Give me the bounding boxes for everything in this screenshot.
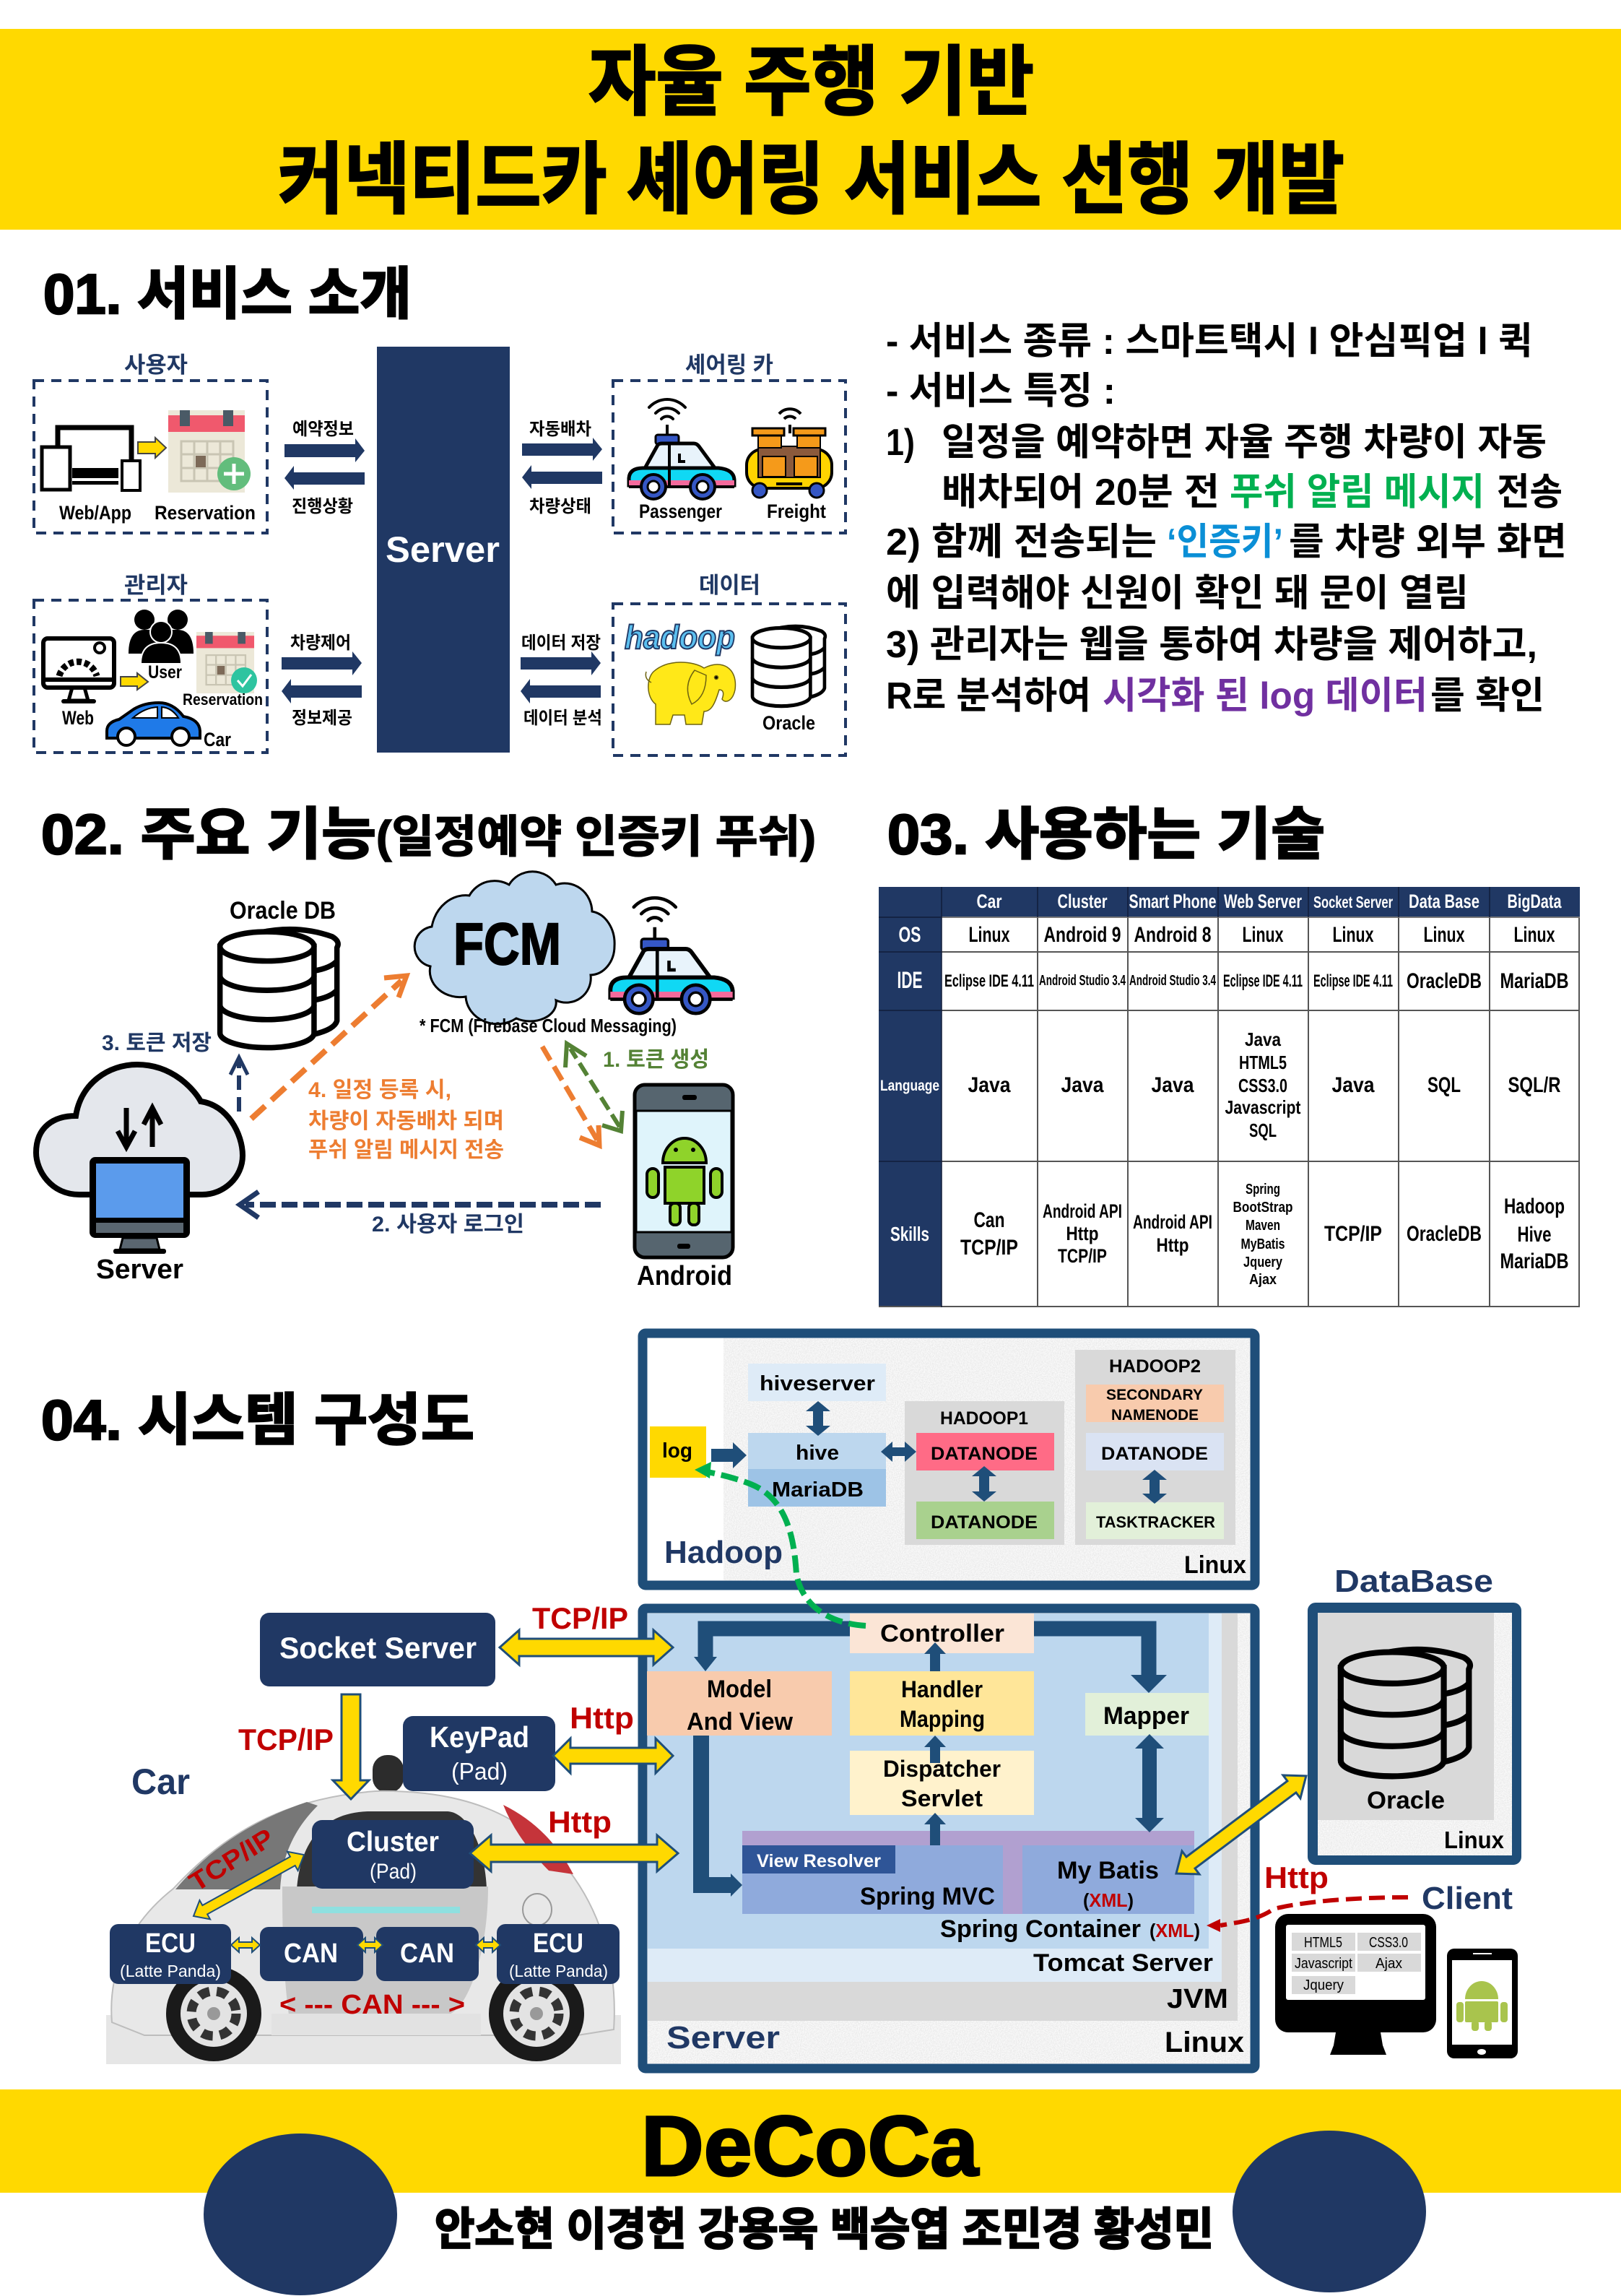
label: user login: 2. 사용자 로그인	[372, 1213, 524, 1236]
text block: service description: 일정을 예약하면 자율 주행 차량이 자동	[942, 422, 1547, 464]
text block: service description: 푸쉬 알림 메시지	[1230, 472, 1485, 514]
table: technologies: CSS3.0	[1238, 1075, 1287, 1096]
hadoop2 node	[1075, 1350, 1235, 1545]
table: technologies: Javascript	[1225, 1096, 1301, 1118]
handler mapping: Mapping	[900, 1706, 985, 1732]
table: technologies: Android Studio 3.4	[1129, 973, 1217, 989]
table: technologies: Android API	[1043, 1200, 1122, 1222]
can right box	[376, 1927, 479, 1981]
table: technologies: SQL	[1249, 1119, 1277, 1141]
text block: service description: 2) 함께 전송되는	[886, 521, 1157, 563]
label: oracle db: Oracle DB	[230, 897, 336, 924]
icon: taxi	[610, 898, 733, 1013]
model and view: Model	[707, 1676, 772, 1703]
text block: service description: 를 차량 외부 화면	[1289, 521, 1567, 563]
icon: calendar add	[168, 410, 251, 493]
arrows: server to car	[522, 420, 602, 516]
arrow: store token	[230, 1057, 248, 1112]
table: technologies: BootStrap	[1233, 1200, 1292, 1216]
table: technologies: Smart Phone	[1129, 891, 1216, 912]
icon: devices	[42, 428, 140, 490]
icon: FCM cloud: FCM	[453, 911, 561, 977]
panel: hadoop: Hadoop	[664, 1535, 783, 1570]
text block: service description: 3) 관리자는 웹을 통하여 차량을 제어하고,	[886, 624, 1537, 666]
hive stack	[748, 1364, 886, 1507]
arrow: fcm to android	[542, 1047, 599, 1145]
handler mapping: Handler	[901, 1676, 983, 1702]
label: step 4	[308, 1078, 504, 1162]
icon: android phone	[635, 1085, 733, 1257]
circle left	[204, 2133, 397, 2295]
icon: elephant	[646, 662, 735, 724]
icon: client monitor: CSS3.0	[1369, 1935, 1408, 1951]
heading: 01 service intro: 01. 서비스 소개	[43, 262, 412, 326]
hadoop2 node: DATANODE	[1101, 1444, 1208, 1464]
table: technologies: Java	[1151, 1073, 1194, 1097]
text block: service description: 배차되어 20분 전	[942, 472, 1220, 514]
panel: server: Spring Container	[940, 1915, 1141, 1943]
table: technologies: TCP/IP	[1058, 1245, 1107, 1267]
labels: protocols: TCP/IP	[532, 1601, 628, 1635]
heading: 02 main feature	[41, 802, 816, 866]
icon: client monitor	[1275, 1914, 1436, 2055]
icon: server cloud	[36, 1065, 243, 1254]
text block: service description: - 서비스 종류 : 스마트택시 l 안심픽업 l 퀵	[886, 321, 1533, 363]
icon: client tablet	[1447, 1949, 1518, 2058]
panel: user: Web/App	[59, 502, 131, 524]
panel: user	[34, 352, 267, 533]
icon: web monitor	[43, 638, 114, 703]
label: car: Car	[131, 1762, 190, 1802]
label: client: Client	[1422, 1881, 1513, 1916]
log box: log	[662, 1439, 692, 1463]
table: technologies: Linux	[1424, 923, 1465, 947]
table: technologies: Data Base	[1409, 891, 1479, 912]
arrows: admin to server: 차량제어	[290, 633, 351, 653]
arrows: user to server	[284, 420, 365, 516]
icon: client monitor: HTML5	[1304, 1935, 1342, 1951]
table: technologies: TCP/IP	[1324, 1222, 1382, 1246]
table: technologies: Skills	[890, 1223, 929, 1245]
labels: protocols: Http	[548, 1805, 612, 1839]
table: technologies: Linux	[969, 923, 1010, 947]
hadoop1 node: DATANODE	[931, 1512, 1038, 1533]
note: FCM: * FCM (Firebase Cloud Messaging)	[420, 1015, 677, 1036]
table: technologies: Http	[1066, 1223, 1099, 1244]
ecu right box: ECU	[533, 1928, 583, 1959]
arrows: server to data: 데이터 저장	[521, 633, 601, 653]
panel: admin: Web	[62, 707, 94, 729]
panel: data: Oracle	[762, 712, 815, 734]
table: technologies: Web Server	[1224, 891, 1302, 912]
label: step 4: 4. 일정 등록 시,	[308, 1078, 451, 1102]
hive stack: hive	[796, 1442, 839, 1465]
table: technologies: Android 8	[1134, 923, 1212, 947]
icon: arrow	[121, 673, 148, 690]
icon: hadoop logo: hadoop	[625, 618, 735, 656]
label: step 4: 푸쉬 알림 메시지 전송	[308, 1138, 504, 1162]
panel: sharing car: Freight	[767, 501, 826, 522]
dispatcher servlet	[850, 1751, 1034, 1815]
text block: service description: 에 입력해야 신원이 확인 돼 문이 열림	[886, 573, 1469, 615]
footer banner	[0, 2089, 1621, 2295]
ecu left box: ECU	[145, 1928, 196, 1959]
arrow: user login	[240, 1192, 601, 1218]
footer banner: 안소현 이경헌 강용욱 백승엽 조민경 황성민	[435, 2205, 1214, 2255]
table: technologies: Language	[880, 1078, 939, 1094]
icon: users	[129, 610, 194, 664]
arrows: car bus	[231, 1938, 500, 1952]
cluster box	[312, 1820, 474, 1889]
table: technologies: MyBatis	[1240, 1236, 1285, 1252]
label: token generate: 1. 토큰 생성	[603, 1048, 709, 1072]
socket server box	[260, 1613, 495, 1686]
table: technologies: OS	[898, 923, 921, 947]
panel: server: Tomcat Server	[1033, 1949, 1213, 1977]
label: step 4: 차량이 자동배차 되며	[308, 1109, 504, 1133]
table: technologies: SQL/R	[1508, 1073, 1561, 1097]
arrows: admin to server	[282, 633, 362, 728]
panel: user: Reservation	[155, 502, 256, 524]
arrows: server to car: 자동배차	[529, 420, 591, 439]
arrows: user to server: 예약정보	[292, 420, 354, 439]
panel: push flow diagram	[36, 872, 733, 1291]
panel: admin: Car	[204, 729, 231, 750]
table: technologies: Java	[968, 1073, 1011, 1097]
arrow: client to spring dashed	[1207, 1897, 1408, 1932]
arrows: connections	[333, 1630, 1315, 1885]
panel: car	[106, 1613, 621, 2064]
panel: admin: Reservation	[183, 690, 263, 709]
table: technologies: Java	[1245, 1028, 1281, 1050]
label: server: Server	[96, 1255, 183, 1285]
panel: hadoop: Linux	[1184, 1551, 1246, 1579]
table: technologies: OracleDB	[1407, 969, 1482, 993]
labels: protocols	[238, 1601, 1329, 1894]
hadoop1 node: DATANODE	[931, 1444, 1038, 1464]
title banner: 자율 주행 기반	[588, 40, 1034, 125]
model and view	[647, 1671, 832, 1736]
model and view: And View	[687, 1708, 794, 1736]
handler mapping	[850, 1671, 1034, 1736]
icon: arrow	[138, 438, 166, 458]
label: tcp ip diagonal: TCP/IP	[184, 1822, 279, 1897]
text block: service description: R로 분석하여	[886, 675, 1091, 717]
text block: service description: 를 확인	[1430, 675, 1544, 717]
icon: client monitor: Jquery	[1303, 1977, 1344, 1993]
table: technologies: Maven	[1246, 1218, 1280, 1234]
table: technologies: Http	[1157, 1234, 1188, 1256]
log box	[650, 1426, 706, 1478]
arrows: server to car: 차량상태	[529, 497, 591, 516]
hadoop1 node: HADOOP1	[940, 1408, 1028, 1429]
table: technologies: Hadoop	[1504, 1195, 1565, 1218]
table: technologies: Android Studio 3.4	[1039, 973, 1126, 989]
labels: protocols: TCP/IP	[238, 1723, 334, 1756]
panel: server	[643, 1608, 1255, 2068]
icon: passenger car	[629, 399, 734, 499]
panel: database: Oracle	[1367, 1787, 1445, 1814]
text block: service description: 시각화 된 log 데이터	[1103, 675, 1427, 717]
footer banner: DeCoCa	[641, 2099, 979, 2194]
heading: 02 main feature: (일정예약 인증키 푸쉬)	[376, 813, 816, 862]
table: technologies: HTML5	[1239, 1052, 1287, 1073]
cluster box: (Pad)	[370, 1860, 417, 1884]
table: technologies: Linux	[1242, 923, 1284, 947]
controller	[850, 1613, 1034, 1653]
icon: FCM cloud	[414, 872, 614, 1024]
hadoop2 node: TASKTRACKER	[1096, 1513, 1215, 1531]
arrows: user to server: 진행상황	[292, 497, 353, 516]
icon: blue car	[107, 703, 200, 745]
panel: server: Linux	[1165, 2027, 1244, 2058]
panel: data: 데이터	[699, 573, 760, 598]
can left box: CAN	[284, 1938, 338, 1969]
icon: client monitor: Ajax	[1376, 1956, 1402, 1972]
table: technologies: IDE	[897, 967, 923, 993]
icon: client monitor: Javascript	[1295, 1956, 1352, 1972]
keypad box: KeyPad	[430, 1720, 529, 1754]
icon: database	[752, 626, 825, 706]
title banner	[0, 29, 1621, 230]
cluster box: Cluster	[347, 1827, 439, 1858]
arrow: schedule push	[251, 976, 407, 1119]
panel: sharing car: Passenger	[639, 501, 722, 522]
table: technologies: TCP/IP	[960, 1236, 1018, 1260]
table: technologies: Android 9	[1044, 923, 1121, 947]
dispatcher servlet: Dispatcher	[883, 1756, 1001, 1782]
table: technologies: MariaDB	[1500, 969, 1568, 993]
arrows: spring flow	[694, 1629, 1167, 1897]
table: technologies: Java	[1331, 1073, 1375, 1097]
hadoop2 node: HADOOP2	[1109, 1356, 1201, 1377]
panel: service architecture	[34, 347, 846, 755]
panel: server: JVM	[1167, 1984, 1228, 2014]
controller: Controller	[880, 1620, 1004, 1647]
icon: autonomous car	[106, 1755, 621, 2064]
table: technologies: Can	[973, 1208, 1005, 1232]
table: technologies: Eclipse IDE 4.11	[1223, 971, 1303, 991]
table: technologies: Android API	[1133, 1211, 1212, 1233]
mapper	[1085, 1693, 1209, 1736]
table: technologies: Ajax	[1249, 1272, 1277, 1288]
table: technologies	[879, 887, 1580, 1307]
mapper: Mapper	[1103, 1702, 1189, 1730]
panel: admin	[34, 573, 267, 753]
dispatcher servlet: Servlet	[901, 1785, 983, 1811]
panel: database: Linux	[1444, 1827, 1505, 1853]
arrows: server to data: 데이터 분석	[523, 709, 602, 728]
panel: sharing car: 셰어링 카	[685, 352, 773, 378]
label: android: Android	[637, 1261, 732, 1291]
table: technologies: Spring	[1246, 1182, 1280, 1197]
table: technologies: BigData	[1508, 891, 1562, 912]
hadoop1 node	[905, 1401, 1064, 1545]
hadoop2 node: SECONDARY	[1106, 1387, 1203, 1403]
ecu left box	[110, 1924, 231, 1984]
panel: database	[1313, 1564, 1516, 1860]
server column	[377, 347, 510, 753]
table: technologies: Car	[976, 891, 1002, 912]
hive stack: MariaDB	[772, 1478, 864, 1502]
table: technologies: Linux	[1513, 923, 1555, 947]
table: technologies: Jquery	[1243, 1255, 1283, 1270]
table: technologies: Eclipse IDE 4.11	[1313, 971, 1393, 991]
ecu left box: (Latte Panda)	[120, 1962, 221, 1980]
arrows: server to data	[521, 633, 602, 728]
panel: data	[613, 573, 846, 755]
keypad box: (Pad)	[451, 1758, 508, 1785]
arrow: controller log dashed	[695, 1462, 866, 1626]
title banner: 커넥티드카 셰어링 서비스 선행 개발	[278, 136, 1344, 223]
panel: user: 사용자	[124, 352, 188, 378]
text block: service description: 1)	[886, 422, 915, 464]
text block: service description: 전송	[1497, 472, 1563, 514]
spring mvc group: Spring MVC	[860, 1883, 995, 1910]
panel: hadoop	[643, 1333, 1255, 1585]
labels: protocols: Http	[570, 1701, 634, 1735]
spring mvc group: My Batis	[1057, 1857, 1159, 1884]
label: token store: 3. 토큰 저장	[102, 1031, 212, 1055]
hadoop2 node: NAMENODE	[1111, 1407, 1199, 1424]
socket server box: Socket Server	[279, 1631, 477, 1665]
text block: service description	[886, 321, 1567, 717]
panel: admin: User	[148, 662, 182, 683]
table: technologies: MariaDB	[1500, 1249, 1568, 1273]
arrow: log to hive	[711, 1442, 747, 1468]
table: technologies: Linux	[1333, 923, 1374, 947]
arrow: hive to datanode	[881, 1442, 916, 1462]
panel: server: Server	[666, 2020, 780, 2055]
icon: calendar check	[196, 632, 257, 693]
labels: protocols: Http	[1264, 1860, 1329, 1894]
spring mvc group: View Resolver	[757, 1851, 881, 1871]
table: technologies: Cluster	[1057, 891, 1108, 912]
icon: database	[1341, 1650, 1470, 1776]
text block: service description: - 서비스 특징 :	[886, 371, 1116, 412]
icon: database	[220, 930, 338, 1048]
text block: service description: ‘인증키’	[1167, 521, 1283, 563]
arrows: admin to server: 정보제공	[292, 709, 352, 728]
can left box	[260, 1927, 363, 1981]
can right box: CAN	[400, 1938, 454, 1969]
xml label: (XML)	[1150, 1920, 1200, 1941]
panel: admin: 관리자	[124, 573, 188, 598]
ecu right box	[497, 1924, 620, 1984]
heading: 04 system architecture: 04. 시스템 구성도	[41, 1388, 474, 1452]
panel: sharing car	[613, 352, 846, 533]
hive stack: hiveserver	[760, 1372, 875, 1395]
table: technologies: SQL	[1427, 1073, 1461, 1097]
spring mvc group	[742, 1831, 1194, 1914]
table: technologies: Socket Server	[1313, 893, 1393, 911]
circle right	[1233, 2131, 1426, 2292]
table: technologies: Hive	[1518, 1223, 1551, 1247]
table: technologies: Java	[1061, 1073, 1104, 1097]
icon: freight car	[747, 409, 832, 498]
arrow: android to fcm token	[565, 1044, 622, 1131]
spring mvc group: (XML)	[1083, 1889, 1134, 1911]
server column: Server	[386, 529, 500, 570]
heading: 03 technology: 03. 사용하는 기술	[887, 802, 1325, 866]
heading: 02 main feature: 02. 주요 기능	[41, 802, 376, 866]
table: technologies: OracleDB	[1407, 1222, 1482, 1246]
ecu right box: (Latte Panda)	[509, 1962, 608, 1980]
table: technologies: Eclipse IDE 4.11	[944, 971, 1034, 991]
panel: database: DataBase	[1334, 1564, 1493, 1599]
label: can bus: < --- CAN --- >	[279, 1990, 465, 2020]
arrow: ecu cluster	[188, 1845, 309, 1925]
keypad box	[403, 1716, 555, 1791]
